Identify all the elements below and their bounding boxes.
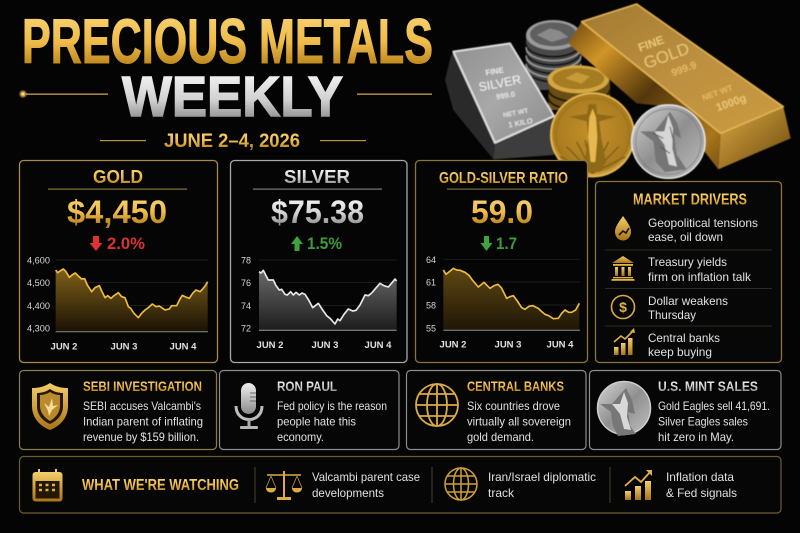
icon: silver eagle coin: [598, 382, 650, 436]
panel: gold: [20, 160, 218, 362]
change: ratio down: 1.7: [496, 234, 517, 253]
heading: SEBI: SEBI INVESTIGATION: [83, 378, 202, 394]
silver bar: [445, 43, 554, 159]
watch item: Iran/Israel: [488, 470, 596, 500]
body: central banks: [467, 399, 571, 444]
heading: ratio: GOLD-SILVER RATIO: [439, 170, 568, 187]
chart: gold price: JUN 2: [51, 342, 77, 352]
coin stack: gold: [548, 65, 610, 110]
body: Ron Paul: [277, 399, 387, 444]
silver bar: NET WT: [503, 108, 529, 119]
driver: geopolitical: [648, 216, 758, 244]
driver: dollar: Dollar weakens: [648, 294, 728, 308]
panel: market drivers: [596, 182, 782, 362]
body: mint: Gold Eagles sell 41,691.: [658, 399, 770, 413]
chart: ratio: JUN 4: [547, 340, 574, 350]
watch item: Iran/Israel: track: [488, 486, 515, 500]
body: central banks: Six countries drove: [467, 399, 560, 413]
driver: central banks: keep buying: [648, 345, 712, 359]
silver bar: 999.0: [495, 90, 516, 101]
chart: gold price: JUN 4: [170, 342, 197, 352]
date line: JUNE 2–4, 2026: [164, 130, 300, 152]
icon: small globe: [445, 468, 477, 500]
watch item: Valcambi: developments: [312, 486, 384, 500]
chart: gold price: 4,500: [27, 278, 50, 289]
gold bar: [568, 4, 791, 169]
icon: oil drop: [615, 216, 631, 240]
icon: shield: [32, 383, 68, 430]
watch item: inflation: Inflation data: [666, 470, 734, 484]
chart: silver price: 74: [241, 301, 251, 312]
body: SEBI: [83, 399, 203, 444]
icon: scales: [266, 471, 302, 500]
chart: silver price: JUN 2: [257, 340, 283, 351]
icon: dollar coin: $: [619, 299, 627, 315]
price: gold: $4,450: [67, 194, 167, 230]
change: ratio down: [480, 234, 517, 253]
image: silver and gold bars with coins: [445, 4, 791, 178]
chart: ratio: [426, 255, 580, 350]
icon: rising bars: [614, 328, 635, 355]
title: [18, 7, 433, 129]
body: Ron Paul: Fed policy is the reason: [277, 399, 387, 413]
icon: bank: [612, 256, 634, 281]
change: gold down: 2.0%: [107, 234, 145, 253]
coin stack: silver: [526, 20, 581, 90]
body: mint: Silver Eagles sales: [658, 414, 748, 428]
gold bar: NET WT: [701, 82, 734, 103]
icon: rising chart: [625, 470, 652, 500]
silver bar: 1 KILO: [508, 116, 534, 130]
value: ratio: 59.0: [471, 194, 533, 230]
chart: ratio: JUN 3: [495, 340, 521, 350]
watch item: Iran/Israel: Iran/Israel diplomatic: [488, 470, 596, 484]
watch item: inflation: [666, 470, 737, 500]
chart: silver price: JUN 4: [365, 340, 392, 351]
chart: ratio: JUN 2: [440, 340, 466, 350]
driver: central banks: Central banks: [648, 331, 720, 345]
heading: silver: SILVER: [284, 167, 350, 187]
chart: silver price: 78: [241, 256, 251, 266]
chart: silver price: 72: [241, 324, 251, 334]
chart: ratio: 64: [426, 255, 436, 266]
watch item: Valcambi: Valcambi parent case: [312, 470, 420, 484]
change: gold down: [90, 234, 145, 253]
driver: dollar: [648, 294, 728, 322]
chart: gold price: 4,300: [27, 324, 50, 334]
body: central banks: virtually all sovereign: [467, 414, 571, 428]
chart: gold price: JUN 3: [111, 342, 137, 352]
sparkle: [18, 90, 28, 98]
gold bar: 999.9: [670, 60, 698, 79]
price: silver: $75.38: [271, 194, 364, 230]
title line: precious metals: PRECIOUS METALS: [22, 7, 433, 77]
panel: what we're watching: [20, 456, 781, 513]
heading: central banks: CENTRAL BANKS: [467, 378, 564, 394]
chart: silver price: JUN 3: [312, 340, 338, 351]
watch item: inflation: & Fed signals: [666, 486, 737, 500]
silver coin: [632, 105, 705, 178]
gold bar: FINE: [636, 33, 666, 55]
driver: treasury: Treasury yields: [648, 255, 727, 269]
driver: treasury: firm on inflation talk: [648, 270, 752, 284]
panel: central banks: [406, 370, 586, 450]
icon: dollar coin: [612, 296, 634, 318]
chart: silver price: 76: [241, 278, 251, 289]
change: silver up: [291, 234, 342, 253]
heading: Ron Paul: RON PAUL: [277, 378, 337, 394]
body: mint: hit zero in May.: [658, 430, 734, 444]
body: Ron Paul: people hate this: [277, 414, 356, 428]
body: SEBI: SEBI accuses Valcambi's: [83, 399, 201, 413]
driver: central banks: [648, 331, 720, 359]
icon: globe: [416, 384, 458, 426]
gold bar: GOLD: [641, 39, 692, 73]
watch item: Valcambi: [312, 470, 420, 500]
panel: U.S. Mint sales: [590, 370, 781, 450]
panel: SEBI investigation: [20, 370, 216, 450]
chart: ratio: 61: [426, 278, 436, 288]
title line: weekly: WEEKLY: [122, 65, 343, 129]
body: Ron Paul: economy.: [277, 430, 324, 444]
chart: gold price: [27, 256, 208, 352]
change: silver up: 1.5%: [307, 234, 342, 253]
chart: ratio: 58: [426, 300, 436, 312]
driver: treasury: [648, 255, 752, 284]
chart: ratio: 55: [426, 324, 436, 334]
silver bar: FINE: [485, 66, 505, 77]
heading: gold: GOLD: [93, 167, 143, 187]
chart: silver price: [241, 256, 397, 351]
panel: gold-silver ratio: [416, 160, 588, 362]
gold coin: [551, 93, 634, 177]
heading: market drivers: MARKET DRIVERS: [633, 192, 747, 208]
panel: Ron Paul: [220, 370, 399, 450]
driver: geopolitical: ease, oil down: [648, 230, 723, 244]
body: mint: [658, 399, 770, 444]
heading: mint: U.S. MINT SALES: [658, 378, 758, 394]
icon: microphone: [236, 383, 262, 429]
driver: dollar: Thursday: [648, 308, 696, 322]
body: SEBI: revenue by $159 billion.: [83, 430, 199, 444]
silver bar: SILVER: [477, 72, 522, 94]
heading: what we're watching: WHAT WE'RE WATCHING: [82, 477, 239, 494]
panel: silver: [230, 160, 407, 362]
icon: calendar: [32, 469, 62, 502]
chart: gold price: 4,400: [27, 301, 50, 312]
chart: gold price: 4,600: [27, 256, 50, 266]
driver: geopolitical: Geopolitical tensions: [648, 216, 758, 230]
body: SEBI: Indian parent of inflating: [83, 414, 203, 428]
body: central banks: gold demand.: [467, 430, 534, 444]
gold bar: 1000g: [715, 92, 748, 114]
